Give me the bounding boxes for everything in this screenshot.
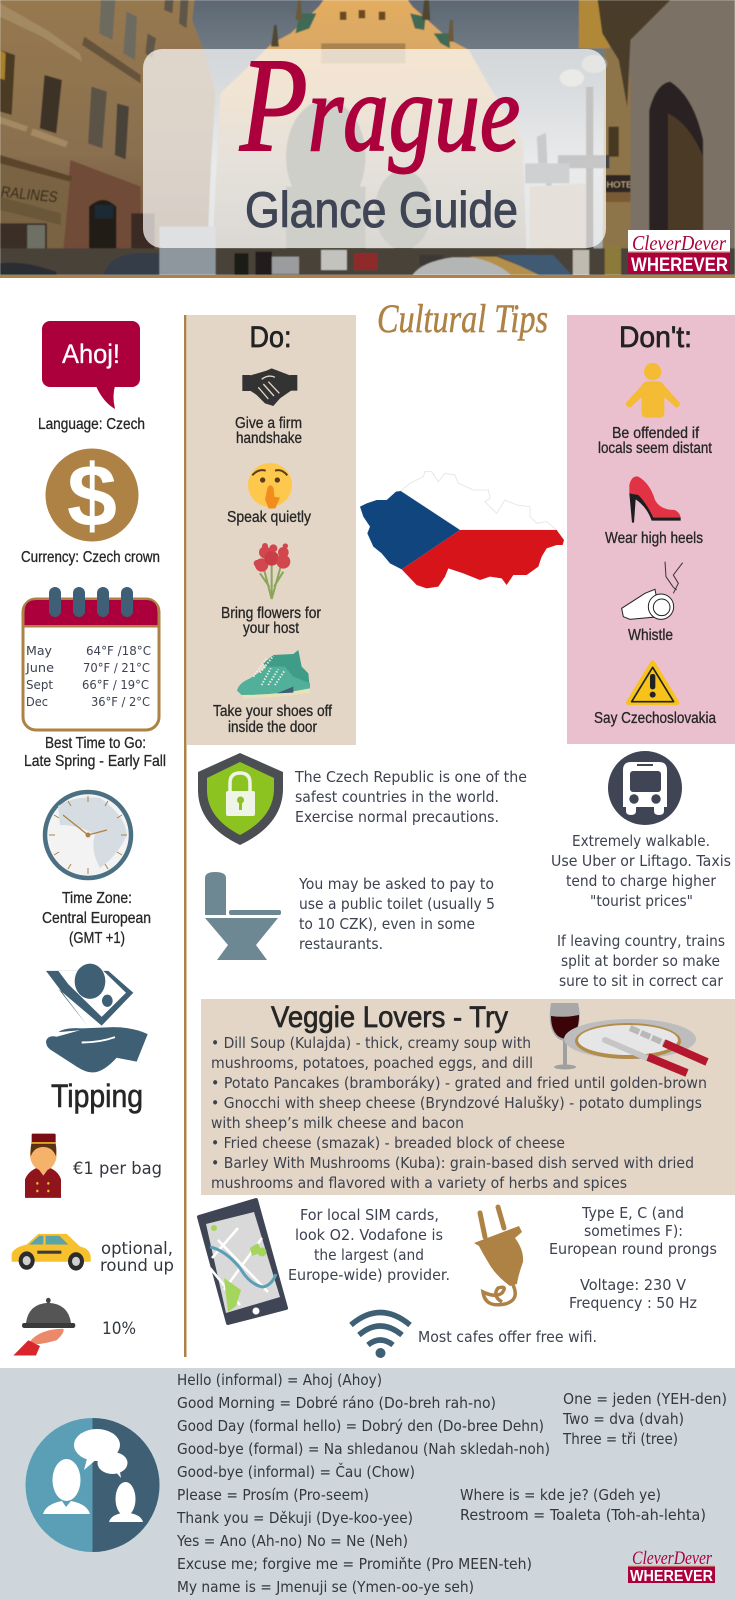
icon: sneakers (237, 650, 310, 698)
text: flowers: your host (243, 620, 299, 637)
panel: Do (187, 315, 356, 745)
text: flowers: Bring flowers for (221, 605, 322, 622)
text: safety (294, 768, 527, 826)
text: dishes (211, 1034, 707, 1192)
text: getting around: "tourist prices" (590, 892, 693, 910)
tip: taxi round up (100, 1239, 174, 1276)
text: common phrases: Good Morning = Dobré ráno (Do-breh rah-no) (177, 1394, 496, 1412)
text: public toilets (298, 875, 495, 953)
label: time zone (42, 890, 151, 947)
text: whistle: Whistle (628, 627, 673, 644)
text: numbers: Two = dva (dvah) (562, 1410, 684, 1428)
icon: two people talking (26, 1418, 160, 1552)
text: plug types: European round prongs (549, 1240, 717, 1258)
text: public toilets: to 10 CZK), even in some (299, 915, 475, 933)
text: dishes: with sheep’s milk cheese and bacon (211, 1114, 464, 1132)
icon: bellhop (25, 1134, 61, 1198)
icon: electric plug (474, 1207, 523, 1305)
icon: whistle (622, 562, 683, 619)
text: plug types: Type E, C (and (581, 1204, 684, 1222)
language: speech bubble (42, 321, 140, 409)
text: SIM cards (288, 1206, 450, 1284)
icon: flowers (254, 543, 290, 599)
text: handshake: handshake (236, 430, 302, 447)
heading: Veggie Lovers: Veggie Lovers - Try (271, 1001, 508, 1034)
text: numbers (562, 1390, 727, 1448)
title: Prague: Prague (239, 30, 520, 179)
heading: Don't: Don't: (619, 321, 692, 354)
text: common phrases: Good-bye (informal) = Čau (Chow) (177, 1462, 415, 1481)
text: common phrases: My name is = Jmenuji se (Ymen-oo-ye seh) (177, 1578, 474, 1596)
text: getting around: split at border so make (561, 952, 720, 970)
icon: currency dollar: $ (67, 446, 117, 545)
text: common phrases: Please = Prosím (Pro-seem) (177, 1486, 369, 1504)
text: dishes: • Dill Soup (Kulajda) - thick, creamy soup with (211, 1034, 531, 1052)
text: directions: Where is = kde je? (Gdeh ye) (460, 1486, 661, 1504)
calendar: best months: 36°F / 2°C (91, 694, 150, 709)
header photo: Prague street (0, 0, 735, 275)
calendar: best months: Sept (26, 677, 53, 692)
label: language: Language: Czech (38, 416, 145, 433)
text: speak quietly: Speak quietly (227, 509, 311, 526)
text: dishes: • Barley With Mushrooms (Kuba): grain-based dish served with dried (211, 1154, 694, 1172)
icon: high heel (629, 476, 681, 523)
text: SIM cards: look O2. Vodafone is (295, 1226, 443, 1244)
text: shoes: inside the door (228, 719, 318, 736)
text: safety: The Czech Republic is one of the (294, 768, 527, 786)
map: Czech Republic flag (360, 472, 564, 588)
icon: taxi (12, 1234, 91, 1271)
logo: footer CleverDever Wherever: WHEREVER (630, 1568, 713, 1585)
logo: footer CleverDever Wherever (628, 1548, 715, 1585)
text: common phrases: Good-bye (formal) = Na shledanou (Nah skledah-noh) (177, 1440, 550, 1458)
text: directions (460, 1486, 706, 1524)
text: plug types: Frequency : 50 Hz (569, 1294, 697, 1312)
icon: wifi (351, 1312, 410, 1358)
icon: warning triangle (628, 663, 677, 703)
calendar: best months: Dec (26, 694, 48, 709)
icon: person shrug (627, 363, 679, 417)
calendar: best months (23, 587, 159, 730)
icon: toilet (205, 872, 281, 960)
text: public toilets: You may be asked to pay to (298, 875, 494, 893)
text: SIM cards: the largest (and (314, 1246, 424, 1264)
tip: taxi round up: optional, (101, 1239, 173, 1259)
text: high heels: Wear high heels (605, 530, 703, 547)
subtitle: Glance Guide: Glance Guide (245, 182, 518, 238)
icon: handshake (242, 368, 297, 406)
text: common phrases: Good Day (formal hello) = Dobrý den (Do-bree Dehn) (177, 1417, 544, 1435)
icon: restaurant cloche (13, 1298, 75, 1356)
language: speech bubble: Ahoj! (62, 339, 120, 369)
text: be offended (598, 425, 712, 457)
text: dishes: • Potato Pancakes (bramboráky) - grated and fried until golden-brown (211, 1074, 707, 1092)
icon: wine and plate (550, 1003, 707, 1073)
label: best time to go: Best Time to Go: (45, 735, 146, 752)
label: best time to go: Late Spring - Early Fall (24, 753, 166, 770)
text: getting around (551, 832, 731, 990)
text: safety: safest countries in the world. (295, 788, 499, 806)
text: handshake: Give a firm (235, 415, 302, 432)
icon: world clock (45, 792, 131, 878)
text: common phrases: Yes = Ano (Ah-no) No = Ne (Neh) (176, 1532, 408, 1550)
icon: phone with map (199, 1200, 286, 1323)
text: SIM cards: Europe-wide) provider. (288, 1266, 450, 1284)
icon: tipping hand with banknote (46, 964, 148, 1072)
vertical gold divider (184, 315, 186, 1357)
text: public toilets: restaurants. (299, 935, 383, 953)
text: flowers (221, 605, 322, 637)
panel: Don't (567, 315, 735, 744)
text: plug types (549, 1204, 717, 1312)
text: dishes: • Fried cheese (smazak) - breaded block of cheese (211, 1134, 565, 1152)
calendar: best months: 66°F / 19°C (82, 677, 149, 692)
logo: CleverDever Wherever (628, 230, 730, 276)
icon: safety shield (198, 753, 283, 845)
icon: currency dollar (46, 446, 138, 545)
panel: phrases footer (0, 1368, 735, 1600)
text: safety: Exercise normal precautions. (295, 808, 499, 826)
label: best time to go (24, 735, 166, 770)
heading: Cultural Tips: Cultural Tips (377, 296, 548, 341)
text: shoes: Take your shoes off (213, 703, 332, 720)
translucent title panel (143, 49, 606, 248)
header photo: Prague street: HOTEL (607, 180, 638, 190)
panel: Veggie Lovers (201, 999, 735, 1195)
text: directions: Restroom = Toaleta (Toh-ah-lehta) (460, 1506, 706, 1524)
text: Czechoslovakia: Say Czechoslovakia (594, 710, 716, 727)
text: common phrases (176, 1371, 550, 1596)
logo: footer CleverDever Wherever: CleverDever (632, 1548, 712, 1569)
text: dishes: • Gnocchi with sheep cheese (Bryndzové Halušky) - potato dumplings (211, 1094, 702, 1112)
text: common phrases: Thank you = Děkuji (Dye-koo-yee) (176, 1509, 413, 1527)
heading: Tipping: Tipping (51, 1078, 143, 1114)
text: be offended: locals seem distant (598, 440, 712, 457)
label: currency: Currency: Czech crown (21, 549, 160, 566)
text: handshake (235, 415, 302, 447)
text: getting around: Extremely walkable. (572, 832, 710, 850)
tip: taxi round up: round up (100, 1256, 174, 1276)
label: time zone: Central European (42, 910, 151, 927)
calendar: best months: 70°F / 21°C (83, 660, 150, 675)
gold header rule (0, 275, 735, 278)
icon: shushing face (248, 463, 292, 509)
icon: bus (608, 751, 682, 825)
text: SIM cards: For local SIM cards, (300, 1206, 439, 1224)
calendar: best months: June (25, 660, 54, 675)
calendar: best months: 64°F /18°C (86, 643, 151, 658)
heading: Do: Do: (250, 321, 292, 354)
text: wifi: Most cafes offer free wifi. (418, 1328, 597, 1346)
text: plug types: sometimes F): (584, 1222, 683, 1240)
text: public toilets: use a public toilet (usually 5 (299, 895, 495, 913)
text: dishes: mushrooms and flavored with a variety of herbs and spices (211, 1174, 627, 1192)
calendar: best months: May (26, 643, 53, 658)
tip: per bag: €1 per bag (73, 1159, 162, 1179)
text: shoes (213, 703, 332, 736)
text: dishes: mushrooms, potatoes, poached eggs, and dill (211, 1054, 533, 1072)
tip: restaurant 10%: 10% (102, 1319, 136, 1338)
label: time zone: Time Zone: (62, 890, 132, 907)
text: be offended: Be offended if (612, 425, 699, 442)
text: plug types: Voltage: 230 V (580, 1276, 687, 1294)
text: common phrases: Hello (informal) = Ahoj (Ahoy) (177, 1371, 382, 1389)
header photo: Prague street: RALINES (0, 183, 59, 206)
text: common phrases: Excuse me; forgive me = Promiňte (Pro MEEN-teh) (177, 1555, 532, 1573)
text: numbers: Three = tři (tree) (562, 1430, 678, 1448)
label: time zone: (GMT +1) (69, 930, 125, 947)
text: getting around: sure to sit in correct car (559, 972, 724, 990)
text: getting around: tend to charge higher (566, 872, 717, 890)
